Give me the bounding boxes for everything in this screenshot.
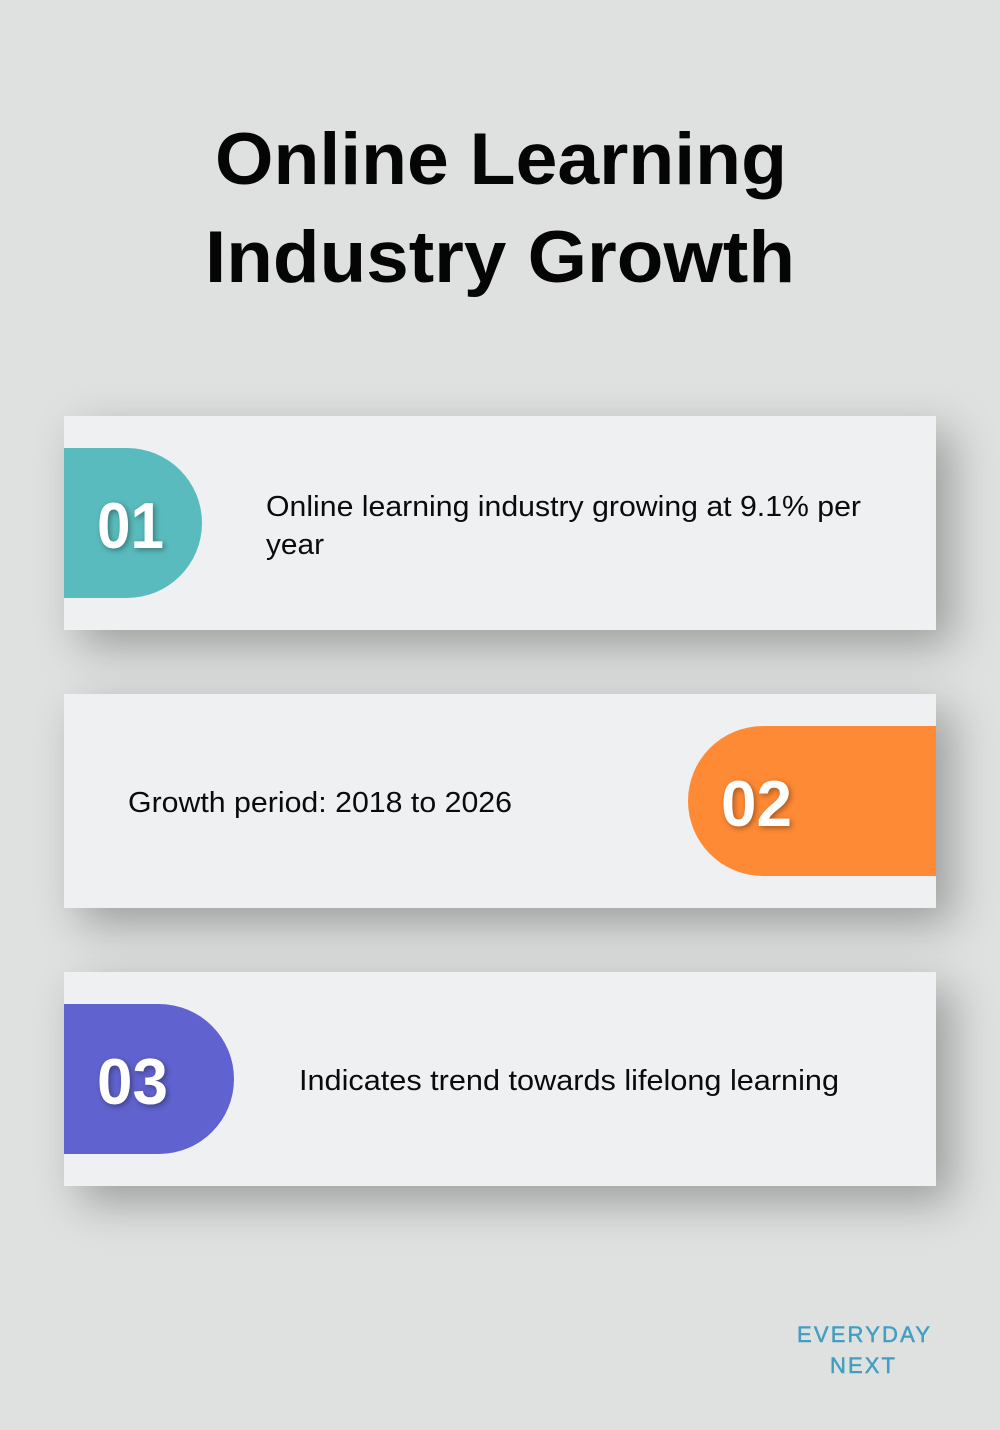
logo: Everyday Next: EVERYDAY [797, 1322, 930, 1347]
text: card 03: Indicates trend towards lifelong learning [299, 1065, 839, 1097]
panel: card 03 [64, 972, 936, 1186]
text: card 01: Online learning industry growing at 9.1% per [266, 491, 861, 523]
badge 03 [64, 1004, 234, 1154]
title [205, 119, 795, 298]
text: card 02: Growth period: 2018 to 2026 [128, 787, 512, 819]
title: Industry Growth [205, 217, 795, 298]
panel: card 01 [64, 416, 936, 630]
text: card 01 [266, 491, 861, 561]
panel: card 02 [64, 694, 936, 908]
badge 01: 01 [97, 489, 164, 562]
badge 02: 02 [721, 767, 792, 840]
logo: Everyday Next [797, 1322, 930, 1378]
badge 01 [64, 448, 202, 598]
text: card 01: year [266, 529, 324, 561]
badge 02 [688, 726, 936, 876]
badge 03: 03 [97, 1045, 168, 1118]
title: Online Learning [215, 119, 787, 200]
logo: Everyday Next: NEXT [830, 1353, 895, 1378]
